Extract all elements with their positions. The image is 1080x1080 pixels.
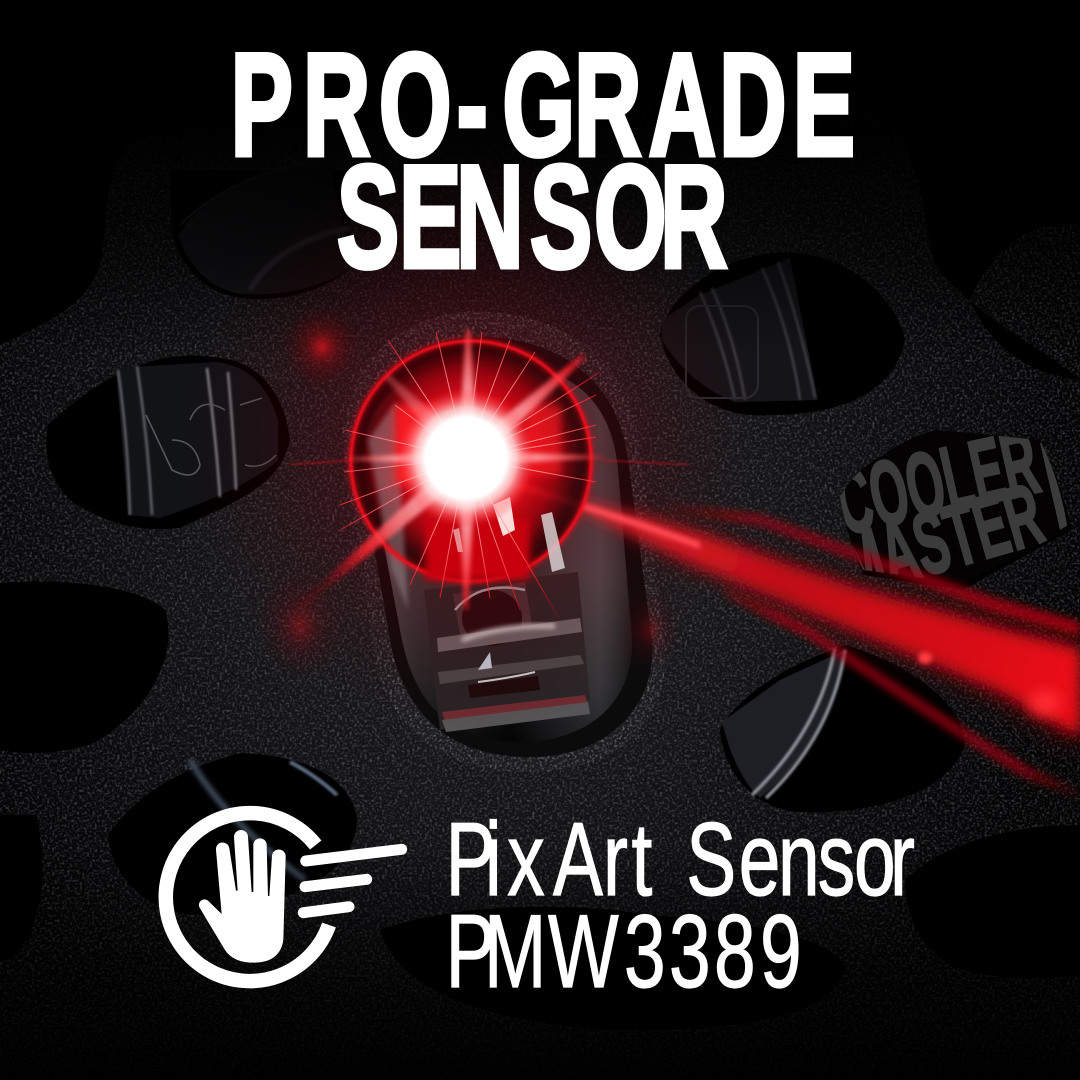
lens flare spot lower left	[254, 567, 346, 683]
icon: hand with motion lines	[166, 813, 402, 981]
title: SENSOR	[337, 135, 728, 298]
sensor label	[446, 802, 915, 1010]
laser beam	[500, 476, 1080, 800]
sensor label: PixArt Sensor	[446, 802, 915, 918]
lens dome	[453, 582, 533, 645]
flare ring	[351, 341, 591, 581]
sensor housing	[342, 312, 666, 772]
title	[231, 23, 855, 298]
title: PRO-GRADE	[231, 23, 855, 186]
motion lines	[303, 849, 402, 913]
lens: upper right window	[662, 258, 818, 402]
light elements	[493, 497, 515, 536]
far ray extensions	[290, 460, 690, 465]
soft rays	[300, 330, 610, 610]
cavity wall showing through	[368, 402, 408, 610]
lens flare spot upper left	[282, 305, 362, 389]
ring	[166, 813, 329, 981]
lens: lower right window	[722, 648, 845, 798]
dark red disc	[351, 341, 591, 581]
white core	[396, 388, 536, 528]
fine rays	[340, 332, 600, 620]
lens: top left window	[178, 160, 350, 294]
lens: lower left window	[190, 760, 337, 880]
cavity	[365, 362, 632, 742]
Cooler Master logo	[840, 430, 1068, 578]
hand	[199, 830, 286, 963]
red haze around sensor	[180, 150, 760, 730]
sensor flare	[290, 330, 690, 620]
bright bands	[437, 618, 582, 652]
lens block	[424, 572, 590, 730]
rim	[342, 311, 666, 772]
lens flare spot lower right	[616, 586, 684, 674]
sensor label: PMW3389	[446, 894, 802, 1010]
lens: left window	[116, 362, 278, 518]
bright red patches	[395, 405, 439, 485]
